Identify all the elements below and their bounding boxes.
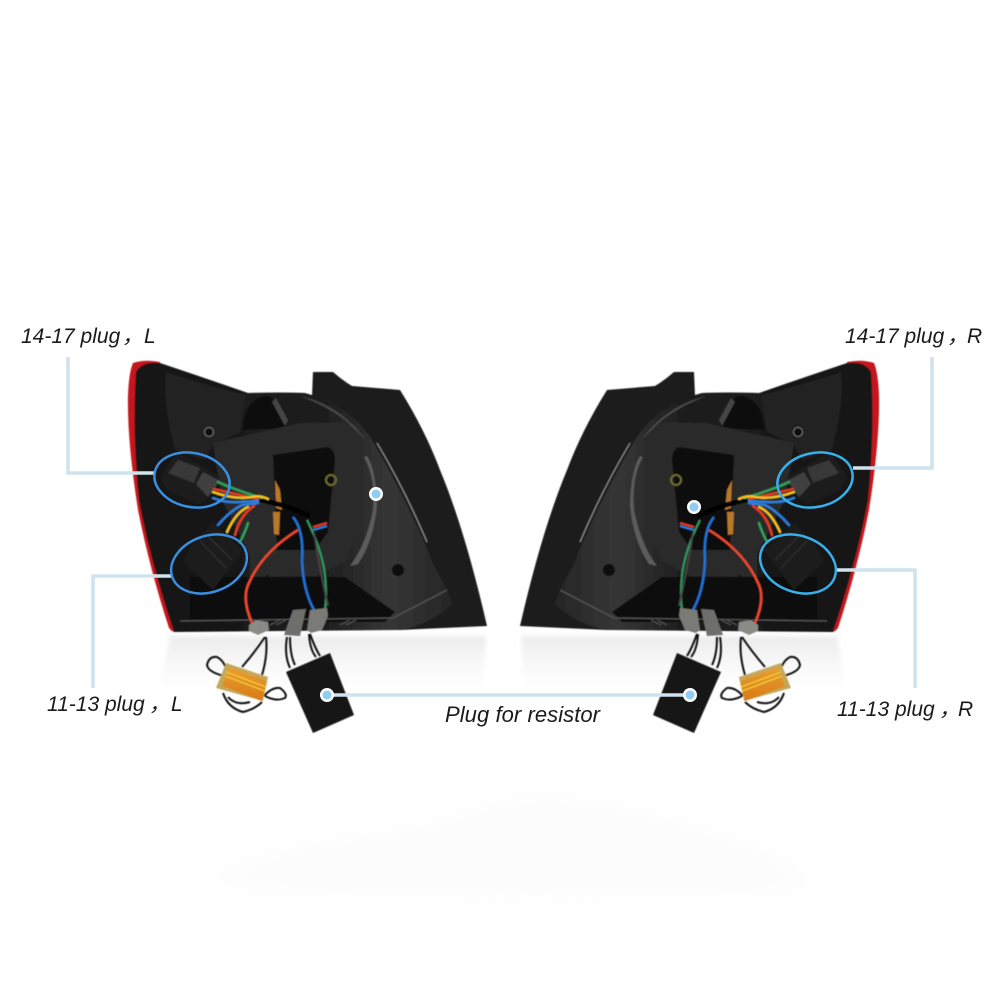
gloss line xyxy=(377,443,427,542)
red lens edge xyxy=(128,361,175,632)
peg xyxy=(794,428,802,436)
gold resistor xyxy=(216,663,268,701)
upper side panel xyxy=(165,372,246,460)
callout ellipse: 11-13 R xyxy=(752,524,844,604)
long dark wire xyxy=(679,533,693,606)
plug wires lower xyxy=(749,503,789,542)
label: 11-13 plug L: 11-13 plug xyxy=(47,693,145,716)
screw xyxy=(603,564,615,576)
lower dark panel xyxy=(612,577,817,622)
long red wire xyxy=(709,530,761,623)
upper plug collar xyxy=(787,472,811,497)
plate hole xyxy=(672,447,734,550)
upper plug collar xyxy=(196,472,220,497)
long blue wire xyxy=(293,517,314,610)
faint car reflection xyxy=(170,794,830,899)
long red wire xyxy=(246,530,298,623)
bottom trim xyxy=(180,590,447,621)
floor reflection right xyxy=(521,636,847,690)
peg xyxy=(204,428,214,436)
upper plug cap xyxy=(168,460,200,483)
connector a xyxy=(738,620,758,635)
bulb bolt xyxy=(326,475,336,485)
wire stub xyxy=(313,523,327,527)
dome highlight xyxy=(719,398,735,426)
connector b xyxy=(701,609,723,636)
label: 11-13 plug L: L xyxy=(171,693,183,716)
long green wire xyxy=(681,520,700,610)
label: 14-17 plug L: ， xyxy=(122,325,143,348)
resistor wire loops xyxy=(207,657,286,712)
wire bundle xyxy=(697,499,749,516)
gloss strip xyxy=(350,456,377,566)
label: 14-17 plug R: R xyxy=(967,325,982,348)
label: 11-13 plug L: ， xyxy=(149,693,170,716)
long black wire xyxy=(739,575,750,623)
bottom slats xyxy=(651,620,737,625)
gloss strip xyxy=(630,456,657,566)
plug wires lower xyxy=(218,503,258,542)
long green wire xyxy=(307,520,326,610)
gloss line xyxy=(580,443,630,542)
center plate xyxy=(644,422,794,577)
wire bundle xyxy=(258,499,310,516)
floor reflection left xyxy=(160,636,486,690)
right tail lamp xyxy=(520,361,879,733)
left tail lamp xyxy=(128,361,487,733)
black module xyxy=(286,653,354,733)
lower plug xyxy=(765,523,824,590)
long dark wire xyxy=(314,533,328,606)
connector b xyxy=(284,609,306,636)
upper plug cap xyxy=(807,460,839,483)
screw xyxy=(392,564,404,576)
leader line: 11-13 plug L xyxy=(93,576,172,688)
label: 11-13 plug R: R xyxy=(958,698,973,721)
lower plug ribs xyxy=(775,535,807,568)
callout ellipse: 14-17 L xyxy=(149,446,235,514)
gold resistor xyxy=(739,663,791,701)
leader line: 11-13 plug R xyxy=(835,570,915,688)
marker dot: right housing xyxy=(687,500,701,514)
marker dot: right module xyxy=(683,688,697,702)
upper plug xyxy=(787,452,847,505)
pigtail wires xyxy=(687,634,765,675)
connector c xyxy=(307,608,328,633)
connector c xyxy=(679,608,700,633)
housing xyxy=(555,363,872,632)
upper gloss xyxy=(641,396,707,440)
label: 14-17 plug L: L xyxy=(144,325,156,348)
bulb bolt xyxy=(671,475,681,485)
red lens edge xyxy=(832,361,879,632)
wire stub blue xyxy=(313,526,327,530)
marker dot: left housing xyxy=(369,487,383,501)
top dome xyxy=(720,396,764,430)
label: 14-17 plug L: 14-17 plug xyxy=(21,325,120,348)
bottom slats xyxy=(270,620,356,625)
leader line: resistor xyxy=(328,693,690,697)
leader line: 14-17 plug R xyxy=(853,357,932,468)
housing xyxy=(135,363,452,632)
label: 14-17 plug R: ， xyxy=(947,325,968,348)
label: plug for resistor: Plug for resistor xyxy=(445,702,602,727)
plug wires upper xyxy=(213,482,268,502)
upper plug xyxy=(160,452,220,505)
outer fin xyxy=(520,372,695,630)
lower plug xyxy=(183,523,242,590)
label: 11-13 plug R: 11-13 plug xyxy=(837,698,935,721)
callout ellipse: 14-17 R xyxy=(772,446,858,514)
lower dark panel xyxy=(190,577,395,622)
label: 11-13 plug R: ， xyxy=(939,698,960,721)
callout ellipse: 11-13 L xyxy=(163,524,255,604)
label: 14-17 plug R: 14-17 plug xyxy=(845,325,944,348)
long black wire xyxy=(257,575,268,623)
marker dot: left module xyxy=(320,688,334,702)
pigtail wires xyxy=(242,634,320,675)
plate hole xyxy=(273,447,335,550)
black module xyxy=(653,653,721,733)
connector a xyxy=(249,620,269,635)
resistor wire loops xyxy=(721,657,800,712)
bottom trim xyxy=(560,590,827,621)
amber bulb piece xyxy=(273,480,282,535)
dome highlight xyxy=(272,398,288,426)
center plate xyxy=(213,422,363,577)
wire stub blue xyxy=(680,526,694,530)
leader line: 14-17 plug L xyxy=(68,357,155,473)
upper gloss xyxy=(300,396,366,440)
outer fin xyxy=(312,372,487,630)
upper side panel xyxy=(761,372,842,460)
plug wires upper xyxy=(739,482,794,502)
wire stub xyxy=(680,523,694,527)
top dome xyxy=(243,396,287,430)
long blue wire xyxy=(693,517,714,610)
lower plug ribs xyxy=(200,535,232,568)
amber bulb piece xyxy=(725,480,734,535)
